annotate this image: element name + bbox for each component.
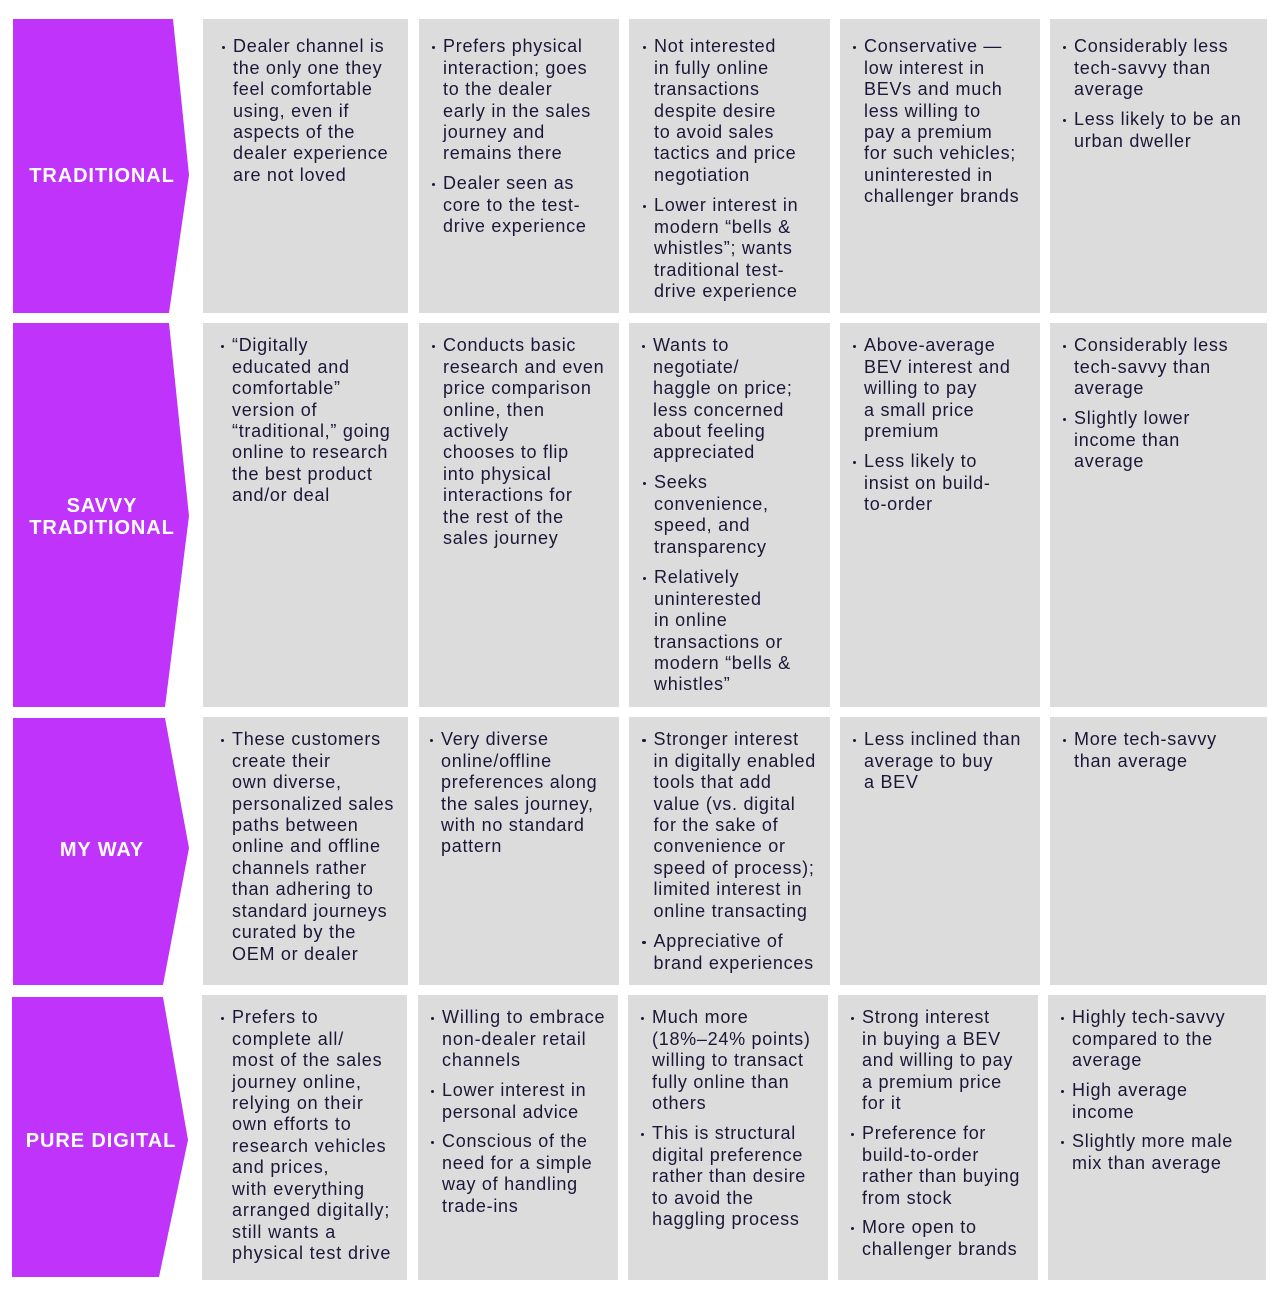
bullet text: curated by the bbox=[232, 922, 356, 942]
bullet text: build-to-order bbox=[862, 1145, 979, 1165]
bullet text: This is structural bbox=[652, 1123, 796, 1143]
bullet text: research and even bbox=[443, 357, 604, 377]
panel: Pure Digital column 1 bbox=[202, 995, 407, 1280]
panel: My Way column 3 bbox=[629, 717, 830, 985]
panel: Savvy Traditional column 4 bbox=[840, 323, 1040, 707]
bullet text: tactics and price bbox=[654, 143, 796, 163]
bullet text: journey online, bbox=[232, 1072, 362, 1092]
bullet text: need for a simple bbox=[442, 1153, 592, 1173]
bullet text: online/offline bbox=[441, 751, 552, 771]
bullet text: transparency bbox=[654, 537, 767, 557]
bullet text: pattern bbox=[441, 836, 502, 856]
bullet text: Less inclined than bbox=[864, 729, 1021, 749]
bullet text: online and offline bbox=[232, 836, 381, 856]
bullet text: most of the sales bbox=[232, 1050, 383, 1070]
bullet text bbox=[1074, 109, 1242, 152]
panel: Savvy Traditional column 2 bbox=[419, 323, 619, 707]
segment arrow: My Way bbox=[13, 718, 189, 985]
bullet text: Dealer channel is bbox=[233, 36, 384, 56]
bullet text: the sales journey, bbox=[441, 794, 594, 814]
bullet text bbox=[232, 1007, 391, 1265]
bullet text: standard journeys bbox=[232, 901, 387, 921]
bullet text bbox=[654, 36, 796, 186]
bullet text: rather than desire bbox=[652, 1166, 806, 1186]
bullet text bbox=[1072, 1007, 1225, 1072]
bullet text: and willing to pay bbox=[862, 1050, 1013, 1070]
bullet text: Very diverse bbox=[441, 729, 549, 749]
bullet text: than average bbox=[1074, 751, 1188, 771]
bullet text: transactions bbox=[654, 79, 760, 99]
bullet text: complete all/ bbox=[232, 1029, 344, 1049]
bullet text: Prefers to bbox=[232, 1007, 319, 1027]
bullet text bbox=[442, 1007, 605, 1072]
bullet text: drive experience bbox=[654, 281, 798, 301]
panel: Traditional column 1 bbox=[203, 19, 408, 313]
bullet text: High average bbox=[1072, 1080, 1188, 1100]
bullet text: average to buy bbox=[864, 751, 993, 771]
panel: Savvy Traditional column 5 bbox=[1050, 323, 1267, 707]
bullet text bbox=[233, 36, 388, 186]
bullet text: in buying a BEV bbox=[862, 1029, 1001, 1049]
bullet text: Wants to bbox=[653, 335, 729, 355]
bullet text: actively bbox=[443, 421, 509, 441]
bullet text: OEM or dealer bbox=[232, 944, 358, 964]
panel: Traditional column 4 bbox=[840, 19, 1040, 313]
bullet text: speed, and bbox=[654, 515, 750, 535]
bullet text: whistles”; wants bbox=[654, 238, 793, 258]
bullet text: Slightly more male bbox=[1072, 1131, 1233, 1151]
bullet text: to-order bbox=[864, 494, 933, 514]
segment name: Savvy Traditional: SAVVY bbox=[67, 494, 137, 516]
bullet text: Seeks bbox=[654, 472, 708, 492]
bullet text: Conservative — bbox=[864, 36, 1002, 56]
bullet text: to avoid the bbox=[652, 1188, 754, 1208]
panel: Pure Digital column 5 bbox=[1048, 995, 1266, 1280]
bullet text: challenger brands bbox=[862, 1239, 1017, 1259]
bullet text bbox=[443, 36, 591, 165]
bullet text bbox=[654, 472, 769, 558]
panel: My Way column 5 bbox=[1050, 717, 1267, 985]
bullet text: dealer experience bbox=[233, 143, 388, 163]
bullet text: about feeling bbox=[653, 421, 765, 441]
bullet text: value (vs. digital bbox=[654, 794, 796, 814]
bullet text: whistles” bbox=[654, 674, 730, 694]
bullet text: low interest in bbox=[864, 58, 985, 78]
bullet text: compared to the bbox=[1072, 1029, 1213, 1049]
bullet text: modern “bells & bbox=[654, 217, 791, 237]
bullet text bbox=[232, 335, 390, 507]
bullet text: willing to pay bbox=[864, 378, 977, 398]
bullet text: channels bbox=[442, 1050, 521, 1070]
bullet text: to the dealer bbox=[443, 79, 552, 99]
bullet text: income bbox=[1072, 1102, 1134, 1122]
bullet text: mix than average bbox=[1072, 1153, 1222, 1173]
bullet text: willing to transact bbox=[652, 1050, 804, 1070]
bullet text: Dealer seen as bbox=[443, 173, 574, 193]
bullet text: More open to bbox=[862, 1217, 977, 1237]
bullet text: and/or deal bbox=[232, 485, 330, 505]
bullet text: arranged digitally; bbox=[232, 1200, 390, 1220]
bullet text: less concerned bbox=[653, 400, 784, 420]
bullet text: Less likely to bbox=[864, 451, 977, 471]
bullet text: Highly tech-savvy bbox=[1072, 1007, 1225, 1027]
panel: Pure Digital column 2 bbox=[418, 995, 618, 1280]
bullet text: average bbox=[1074, 79, 1144, 99]
bullet text bbox=[232, 729, 394, 965]
segment name: Savvy Traditional: TRADITIONAL bbox=[29, 516, 175, 538]
bullet text bbox=[1074, 36, 1228, 101]
bullet text: into physical bbox=[443, 464, 551, 484]
bullet text: own efforts to bbox=[232, 1114, 352, 1134]
bullet text: haggling process bbox=[652, 1209, 800, 1229]
segment name: Pure Digital: PURE DIGITAL bbox=[26, 1130, 176, 1152]
bullet text: income than bbox=[1074, 430, 1180, 450]
bullet text: educated and bbox=[232, 357, 350, 377]
bullet text: are not loved bbox=[233, 165, 346, 185]
bullet text bbox=[1072, 1131, 1233, 1174]
segment name: Traditional: TRADITIONAL bbox=[29, 164, 175, 186]
bullet text: the rest of the bbox=[443, 507, 564, 527]
bullet text: remains there bbox=[443, 143, 562, 163]
panel: Pure Digital column 4 bbox=[838, 995, 1038, 1280]
bullet text: less willing to bbox=[864, 101, 981, 121]
bullet text: Appreciative of bbox=[654, 931, 783, 951]
bullet text: personal advice bbox=[442, 1102, 579, 1122]
bullet text: More tech-savvy bbox=[1074, 729, 1217, 749]
panel: Pure Digital column 3 bbox=[628, 995, 828, 1280]
bullet text bbox=[443, 173, 587, 238]
bullet text: way of handling bbox=[442, 1174, 578, 1194]
panel: My Way column 4 bbox=[840, 717, 1040, 985]
bullet text: “traditional,” going bbox=[232, 421, 390, 441]
bullet text: relying on their bbox=[232, 1093, 364, 1113]
bullet text bbox=[442, 1080, 586, 1123]
bullet text: a premium price bbox=[862, 1072, 1002, 1092]
bullet text: tech-savvy than bbox=[1074, 58, 1211, 78]
bullet text: sales journey bbox=[443, 528, 558, 548]
bullet text: preferences along bbox=[441, 772, 597, 792]
bullet text: version of bbox=[232, 400, 317, 420]
bullet text: feel comfortable bbox=[233, 79, 373, 99]
bullet text: online, then bbox=[443, 400, 545, 420]
bullet text: price comparison bbox=[443, 378, 592, 398]
panel: Traditional column 2 bbox=[419, 19, 619, 313]
bullet text: Not interested bbox=[654, 36, 776, 56]
segment arrow: Traditional bbox=[13, 19, 189, 313]
bullet text: in fully online bbox=[654, 58, 769, 78]
bullet text: Stronger interest bbox=[654, 729, 799, 749]
bullet text: Conscious of the bbox=[442, 1131, 588, 1151]
bullet text: Willing to embrace bbox=[442, 1007, 605, 1027]
bullet text: uninterested in bbox=[864, 165, 993, 185]
bullet text: Conducts basic bbox=[443, 335, 576, 355]
bullet text bbox=[1074, 729, 1217, 772]
bullet text bbox=[442, 1131, 592, 1217]
bullet text: for it bbox=[862, 1093, 901, 1113]
bullet text: modern “bells & bbox=[654, 653, 791, 673]
bullet text: challenger brands bbox=[864, 186, 1019, 206]
bullet text: convenience or bbox=[654, 836, 786, 856]
bullet text: “Digitally bbox=[232, 335, 308, 355]
bullet text: from stock bbox=[862, 1188, 952, 1208]
bullet text: Relatively bbox=[654, 567, 739, 587]
bullet text: trade-ins bbox=[442, 1196, 519, 1216]
bullet text: Considerably less bbox=[1074, 335, 1228, 355]
bullet text bbox=[654, 567, 791, 696]
bullet text bbox=[443, 335, 604, 550]
bullet text: speed of process); bbox=[654, 858, 815, 878]
bullet text: brand experiences bbox=[654, 953, 814, 973]
bullet text: (18%–24% points) bbox=[652, 1029, 811, 1049]
bullet text: premium bbox=[864, 421, 939, 441]
bullet text bbox=[653, 335, 793, 464]
segment arrow: Savvy Traditional bbox=[13, 323, 189, 707]
bullet text: non-dealer retail bbox=[442, 1029, 587, 1049]
bullet text: Slightly lower bbox=[1074, 408, 1190, 428]
bullet text bbox=[862, 1007, 1013, 1114]
bullet text: negotiation bbox=[654, 165, 750, 185]
bullet text bbox=[652, 1007, 811, 1114]
bullet text: still wants a bbox=[232, 1222, 336, 1242]
segment name: Savvy Traditional bbox=[29, 498, 174, 534]
bullet text: interactions for bbox=[443, 485, 573, 505]
bullet text: Considerably less bbox=[1074, 36, 1228, 56]
bullet text: physical test drive bbox=[232, 1243, 391, 1263]
segment name: My Way: MY WAY bbox=[60, 838, 144, 860]
panel: My Way column 2 bbox=[419, 717, 619, 985]
bullet text: average bbox=[1074, 378, 1144, 398]
bullet text bbox=[654, 195, 798, 302]
bullet text: early in the sales bbox=[443, 101, 591, 121]
bullet text: online transacting bbox=[654, 901, 808, 921]
bullet text: to avoid sales bbox=[654, 122, 774, 142]
bullet text: online to research bbox=[232, 442, 388, 462]
bullet text: appreciated bbox=[653, 442, 755, 462]
bullet text: tech-savvy than bbox=[1074, 357, 1211, 377]
bullet text: than adhering to bbox=[232, 879, 374, 899]
bullet text: personalized sales bbox=[232, 794, 394, 814]
bullet text bbox=[652, 1123, 806, 1230]
bullet text: a small price bbox=[864, 400, 974, 420]
bullet text: transactions or bbox=[654, 632, 783, 652]
bullet text: Preference for bbox=[862, 1123, 986, 1143]
bullet text: others bbox=[652, 1093, 706, 1113]
bullet text: journey and bbox=[443, 122, 545, 142]
bullet text: Much more bbox=[652, 1007, 749, 1027]
bullet text: traditional test- bbox=[654, 260, 784, 280]
bullet text: core to the test- bbox=[443, 195, 580, 215]
bullet text: and prices, bbox=[232, 1157, 329, 1177]
bullet text: convenience, bbox=[654, 494, 769, 514]
bullet text: uninterested bbox=[654, 589, 762, 609]
bullet text: paths between bbox=[232, 815, 358, 835]
bullet text: Above-average bbox=[864, 335, 995, 355]
bullet text: digital preference bbox=[652, 1145, 803, 1165]
bullet text: These customers bbox=[232, 729, 381, 749]
bullet text: interaction; goes bbox=[443, 58, 587, 78]
bullet text bbox=[441, 729, 597, 858]
bullet text: aspects of the bbox=[233, 122, 355, 142]
bullet text: insist on build- bbox=[864, 473, 991, 493]
bullet text: average bbox=[1072, 1050, 1142, 1070]
bullet text: despite desire bbox=[654, 101, 776, 121]
bullet text bbox=[862, 1217, 1017, 1260]
bullet text: the best product bbox=[232, 464, 373, 484]
bullet text: Strong interest bbox=[862, 1007, 990, 1027]
bullet text: negotiate/ bbox=[653, 357, 739, 377]
bullet text: Prefers physical bbox=[443, 36, 583, 56]
bullet text bbox=[1074, 408, 1190, 473]
panel: Savvy Traditional column 1 bbox=[203, 323, 408, 707]
bullet text: BEVs and much bbox=[864, 79, 1002, 99]
bullet text: BEV interest and bbox=[864, 357, 1011, 377]
bullet text bbox=[1072, 1080, 1188, 1123]
panel: Traditional column 5 bbox=[1050, 19, 1267, 313]
bullet text: haggle on price; bbox=[653, 378, 793, 398]
bullet text: create their bbox=[232, 751, 331, 771]
panel: My Way column 1 bbox=[203, 717, 408, 985]
bullet text: urban dweller bbox=[1074, 131, 1191, 151]
bullet text: research vehicles bbox=[232, 1136, 387, 1156]
bullet text bbox=[864, 729, 1021, 794]
bullet text: own diverse, bbox=[232, 772, 342, 792]
segment arrow: Pure Digital bbox=[12, 997, 188, 1277]
bullet text: in online bbox=[654, 610, 728, 630]
bullet text bbox=[862, 1123, 1020, 1209]
bullet text: tools that add bbox=[654, 772, 772, 792]
bullet text: for the sake of bbox=[654, 815, 778, 835]
bullet text: in digitally enabled bbox=[654, 751, 816, 771]
bullet text: drive experience bbox=[443, 216, 587, 236]
bullet text: with everything bbox=[232, 1179, 365, 1199]
bullet text bbox=[864, 451, 991, 516]
bullet text bbox=[864, 36, 1019, 208]
panel: Savvy Traditional column 3 bbox=[629, 323, 830, 707]
bullet text: chooses to flip bbox=[443, 442, 569, 462]
bullet text: fully online than bbox=[652, 1072, 789, 1092]
bullet text bbox=[654, 931, 814, 974]
bullet text bbox=[654, 729, 816, 922]
bullet text: Less likely to be an bbox=[1074, 109, 1242, 129]
bullet text: channels rather bbox=[232, 858, 367, 878]
bullet text: average bbox=[1074, 451, 1144, 471]
bullet text: Lower interest in bbox=[442, 1080, 586, 1100]
bullet text: a BEV bbox=[864, 772, 919, 792]
bullet text: using, even if bbox=[233, 101, 349, 121]
panel: Traditional column 3 bbox=[629, 19, 830, 313]
bullet text: with no standard bbox=[441, 815, 585, 835]
bullet text: the only one they bbox=[233, 58, 382, 78]
bullet text bbox=[1074, 335, 1228, 400]
bullet text bbox=[864, 335, 1011, 442]
bullet text: for such vehicles; bbox=[864, 143, 1016, 163]
bullet text: limited interest in bbox=[654, 879, 802, 899]
bullet text: pay a premium bbox=[864, 122, 992, 142]
bullet text: Lower interest in bbox=[654, 195, 798, 215]
bullet text: rather than buying bbox=[862, 1166, 1020, 1186]
bullet text: comfortable” bbox=[232, 378, 341, 398]
